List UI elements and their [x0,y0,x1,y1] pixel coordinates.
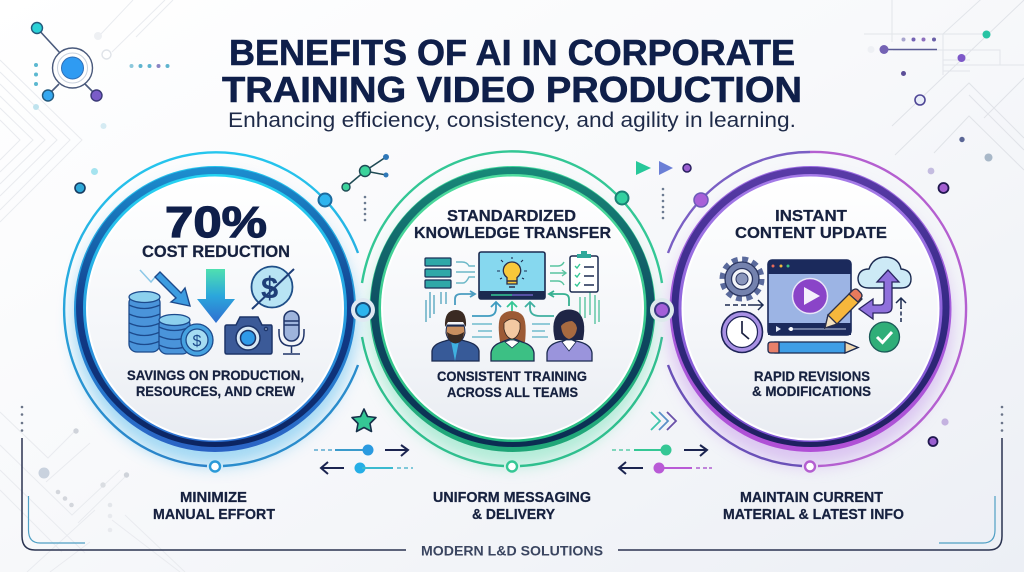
caption: maintain current material [723,490,904,523]
main title [222,32,802,110]
caption: rapid revisions: & MODIFICATIONS [752,383,871,399]
caption: minimize manual effort [153,490,275,523]
icon: falling zigzag arrow [140,270,190,306]
caption: savings: RESOURCES, AND CREW [136,383,296,399]
stat: 70%: 70% [165,198,267,247]
icon: server stack [425,258,451,288]
caption: uniform messaging [433,490,591,523]
icon: microphone [279,311,304,354]
icon: coin stacks [129,292,213,356]
decorative dots and nodes: top right [683,30,992,446]
caption: savings: SAVINGS ON PRODUCTION, [127,367,304,383]
caption: maintain current material: MATERIAL & LATEST INFO [723,507,904,523]
decorative dots: bottom right [1001,406,1003,432]
caption: uniform messaging: & DELIVERY [472,507,555,523]
icon: green star [352,409,376,432]
caption: maintain current material: MAINTAIN CURRENT [740,490,883,506]
icon: gear [722,259,762,299]
caption: rapid revisions: RAPID REVISIONS [754,368,870,384]
icon: triple chevrons [651,412,676,430]
icon: crossed dollar: $ [261,270,278,305]
network icon: between circles [342,154,389,191]
heading: instant content update: INSTANT [775,208,847,225]
icon: camera [225,317,272,354]
icon: blue pencil [768,342,858,353]
icon: down arrow [197,269,235,323]
icon: coin dollar sign: $ [192,333,202,350]
dotted column: right gap [662,188,664,219]
caption: consistent training [437,368,587,400]
subtitle: Enhancing efficiency, consistency, and agility in learning. [228,109,796,132]
play triangles: top centre right [636,161,673,175]
heading: standardized knowledge transfer: STANDARDIZED [447,208,576,225]
caption: uniform messaging: UNIFORM MESSAGING [433,490,591,506]
icon: purple routing arrow [859,270,899,319]
icon: dashed arrow [725,300,763,310]
dotted column: left gap [364,196,366,221]
arrows: blue to green connector [314,444,413,474]
person: woman with dark hair [547,310,592,361]
main title: TRAINING VIDEO PRODUCTION [222,69,802,110]
heading: standardized knowledge transfer: KNOWLEDGE TRANSFER [414,225,611,242]
caption: consistent training: ACROSS ALL TEAMS [447,384,578,400]
icon: presentation screen with lightbulb [479,252,545,299]
arrows: green to purple connector [612,444,712,474]
icon: video window [768,260,851,335]
heading: instant content update: CONTENT UPDATE [735,225,887,242]
circle frame: green [362,151,662,472]
person: woman with long hair [491,311,534,361]
caption: minimize manual effort: MINIMIZE [180,490,247,506]
footer frame [22,438,1002,550]
heading: standardized knowledge transfer [414,208,611,242]
icon: small dashed up arrow [896,298,906,322]
icon: clock [722,312,762,352]
top-left network icon [32,22,102,101]
caption: savings [127,367,304,399]
icon: crossed dollar [252,266,294,309]
connector node: green to purple [650,298,674,322]
icon: check badge [870,322,900,352]
main title: BENEFITS OF AI IN CORPORATE [229,32,795,73]
person: man with beard and glasses [432,310,479,361]
footer label: MODERN L&D SOLUTIONS [421,544,603,558]
icon: upload cloud [858,257,911,288]
panel: cost reduction [64,152,358,472]
connector lines: left [426,262,475,322]
connector node: blue to green [351,298,375,322]
arrows: people to screen [455,291,569,337]
decorative dots: bottom left [21,406,129,532]
caption: minimize manual effort: MANUAL EFFORT [153,507,275,523]
decorative dots: top left [33,32,170,193]
caption: consistent training: CONSISTENT TRAINING [437,368,587,384]
icon: checklist clipboard [570,251,598,292]
caption: rapid revisions [752,368,871,399]
panel: instant content update [668,152,966,472]
heading: cost reduction: COST REDUCTION [142,243,290,261]
icon: yellow pencil [825,289,862,328]
circle frame: blue [64,152,358,472]
panel: standardized knowledge transfer [362,151,662,472]
connector lines: right [550,262,599,324]
circle frame: purple [668,152,966,472]
heading: instant content update [735,208,887,242]
